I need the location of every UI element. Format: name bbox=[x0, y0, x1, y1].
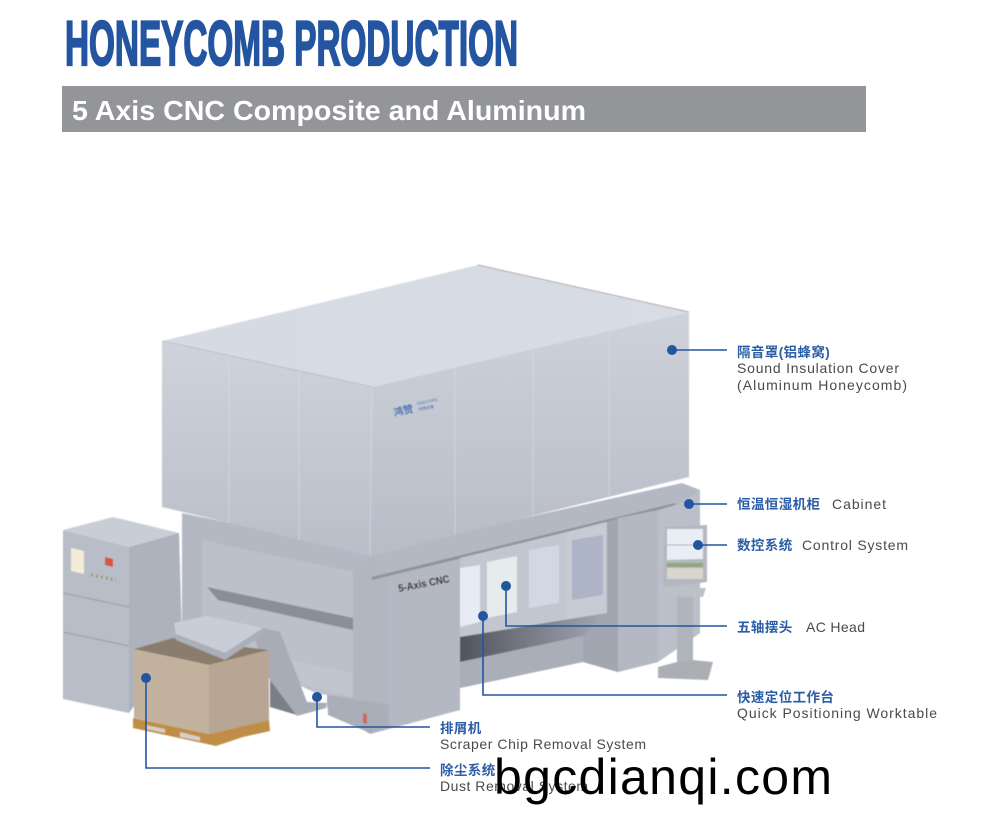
callout: AC head bbox=[501, 581, 865, 635]
machine illustration bbox=[63, 265, 713, 746]
subtitle bar bbox=[62, 86, 866, 132]
callout: sound insulation cover bbox=[667, 344, 907, 393]
cover logo: REECOIRE bbox=[417, 397, 438, 406]
control panel bbox=[658, 525, 713, 680]
chip conveyor bbox=[174, 616, 327, 716]
electrical cabinet bbox=[63, 517, 182, 713]
callout: cabinet: 恒温恒湿机柜 bbox=[737, 496, 820, 512]
callout: control system bbox=[693, 537, 908, 553]
callout: quick positioning worktable: 快速定位工作台 bbox=[737, 689, 834, 705]
callout: sound insulation cover: (Aluminum Honeycomb) bbox=[737, 377, 907, 393]
callout: dust removal system: Dust Removal System bbox=[440, 778, 588, 794]
callout: dust removal system bbox=[141, 673, 588, 794]
title: HONEYCOMB PRODUCTION bbox=[65, 9, 518, 79]
cover logo: 鸿赞 bbox=[392, 402, 414, 419]
label: 5-Axis CNC: 5-Axis CNC bbox=[397, 573, 451, 595]
cardboard box on pallet bbox=[133, 638, 270, 746]
re-drawn hood over box bbox=[174, 616, 264, 660]
callout: sound insulation cover: Sound Insulation Cover bbox=[737, 360, 899, 376]
callout: control system: 数控系统 bbox=[737, 537, 793, 553]
callout: cabinet: Cabinet bbox=[832, 496, 886, 512]
callout: scraper chip removal system: Scraper Chip Removal System bbox=[440, 736, 646, 752]
callout: sound insulation cover: 隔音罩(铝蜂窝) bbox=[737, 344, 830, 360]
callout: quick positioning worktable: Quick Positioning Worktable bbox=[737, 705, 937, 721]
callout: dust removal system: 除尘系统 bbox=[440, 762, 496, 778]
cover logo: 鸿赞设备 bbox=[418, 403, 435, 412]
callout: cabinet bbox=[684, 496, 886, 512]
watermark: bgcdianqi.com bbox=[494, 749, 832, 805]
machine base bbox=[182, 483, 700, 734]
callout: quick positioning worktable bbox=[478, 611, 937, 721]
callout: scraper chip removal system bbox=[312, 692, 646, 752]
callout: AC head: 五轴摆头 bbox=[737, 619, 793, 635]
subtitle bar: 5 Axis CNC Composite and Aluminum bbox=[72, 95, 586, 126]
callout: AC head: AC Head bbox=[806, 619, 865, 635]
sound insulation cover bbox=[162, 265, 689, 556]
callout: control system: Control System bbox=[802, 537, 908, 553]
cover logo bbox=[392, 397, 440, 419]
callout: scraper chip removal system: 排屑机 bbox=[440, 720, 482, 736]
